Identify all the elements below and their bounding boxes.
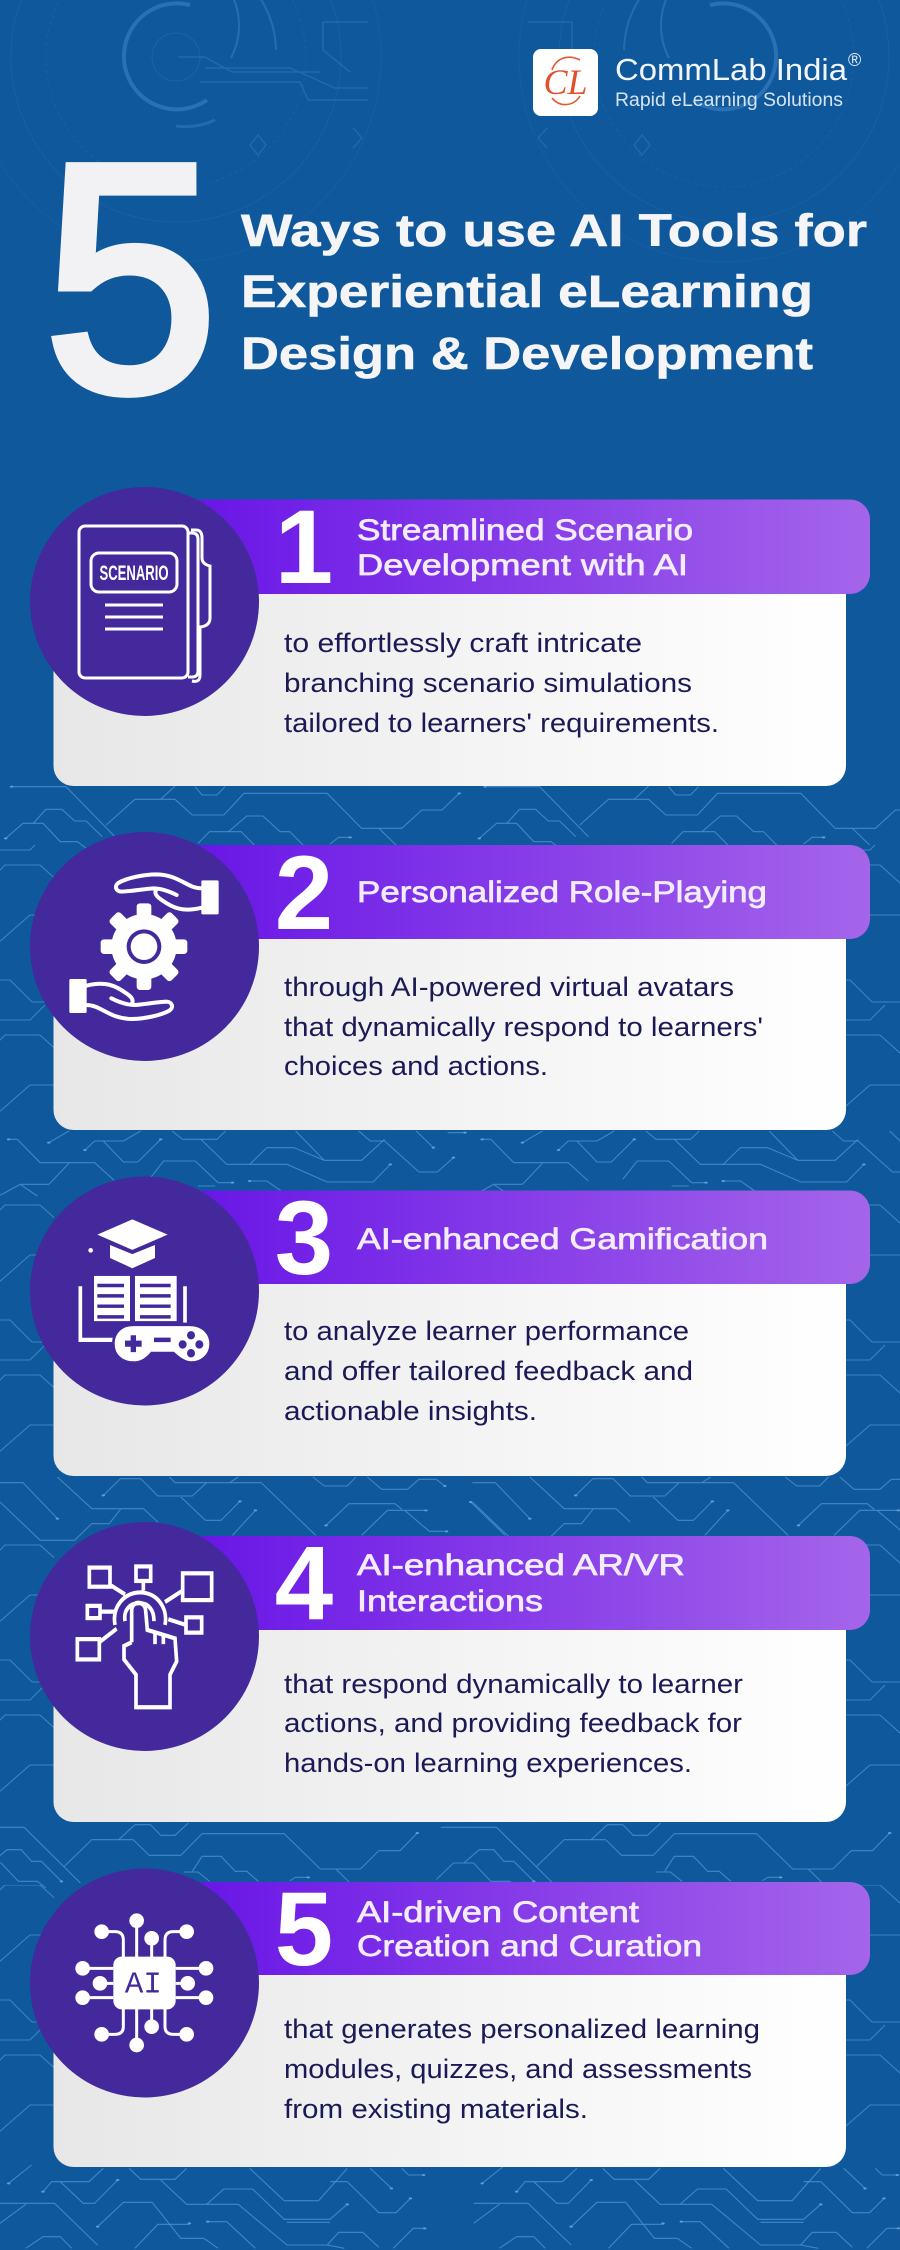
card 4 [54, 1577, 846, 1822]
heading 4: Interactions [357, 1585, 543, 1618]
body text 5 [284, 2014, 760, 2124]
body text 4: actions, and providing feedback for [284, 1708, 742, 1738]
open book [80, 1276, 185, 1340]
body text 1: tailored to learners' requirements. [284, 708, 719, 738]
body text 2 [284, 972, 763, 1081]
card 3 [54, 1231, 846, 1476]
gear [101, 903, 187, 990]
number 1: 1 [275, 489, 333, 606]
card 5 [54, 1922, 846, 2167]
registered mark: ® [848, 50, 861, 70]
logo name: CommLab India [615, 52, 848, 87]
circuit lines between panels 3 and 4 [0, 1477, 900, 1540]
logo mark: CL [543, 62, 588, 102]
body text 3: actionable insights. [284, 1396, 537, 1426]
circle 1 [30, 487, 259, 716]
heading 5: Creation and Curation [357, 1930, 702, 1963]
body text 1 [284, 628, 719, 738]
heading 5: AI-driven Content [357, 1896, 640, 1929]
body text 4: that respond dynamically to learner [284, 1669, 743, 1699]
body text 5: modules, quizzes, and assessments [284, 2054, 752, 2084]
title [241, 205, 867, 379]
body text 3 [284, 1316, 693, 1426]
circuit lines at the bottom [0, 2165, 900, 2248]
body text 3: and offer tailored feedback and [284, 1356, 693, 1386]
icon: AI chip [75, 1913, 213, 2052]
number 4: 4 [275, 1525, 333, 1642]
big number 5: 5 [44, 97, 218, 459]
icon: scenario document [79, 526, 210, 681]
body text 2: through AI-powered virtual avatars [284, 972, 734, 1002]
icon: touch network [77, 1566, 212, 1707]
panel 4: AR/VR [30, 1522, 870, 1822]
number 2: 2 [275, 835, 333, 952]
circle 4 [30, 1522, 259, 1751]
chip traces [83, 1921, 206, 2045]
header bar 4 [144, 1536, 870, 1630]
panel 2: role-playing [30, 832, 870, 1130]
header bar 1 [144, 500, 870, 594]
body text 2: choices and actions. [284, 1051, 548, 1081]
lower hand [71, 980, 172, 1019]
chip nodes [75, 1913, 213, 2052]
logo [533, 49, 861, 116]
circle 3 [30, 1176, 259, 1406]
icon: hands and gear [71, 874, 217, 1019]
number 5: 5 [275, 1871, 333, 1988]
header bar 2 [144, 845, 870, 939]
background HUD left [0, 0, 381, 262]
heading 2: Personalized Role-Playing [357, 876, 767, 909]
number 3: 3 [275, 1180, 333, 1297]
body text 1: branching scenario simulations [284, 668, 692, 698]
background HUD right [519, 0, 900, 262]
circle 5 [30, 1868, 259, 2098]
header bar 5 [144, 1882, 870, 1975]
logo tagline: Rapid eLearning Solutions [615, 90, 843, 111]
graduation cap [88, 1219, 168, 1268]
heading 3: AI-enhanced Gamification [357, 1223, 768, 1256]
upper hand [116, 874, 217, 913]
heading 1: Development with AI [357, 549, 688, 582]
heading 1 [357, 514, 693, 582]
title: Ways to use AI Tools for [241, 205, 867, 256]
chip label: AI [125, 1968, 162, 2003]
icon: scenario document: SCENARIO [100, 562, 168, 585]
gamepad [113, 1325, 211, 1363]
background circuit pattern in side margins [0, 845, 900, 2160]
heading 4 [357, 1549, 685, 1618]
heading 1: Streamlined Scenario [357, 514, 693, 547]
circuit lines between panels 1 and 2 [4, 786, 900, 848]
heading 4: AI-enhanced AR/VR [357, 1549, 685, 1582]
heading 5 [357, 1896, 702, 1963]
title: Experiential eLearning [241, 266, 813, 317]
logo mark [533, 49, 598, 116]
circuit lines between panels 2 and 3 [0, 1131, 900, 1196]
body text 1: to effortlessly craft intricate [284, 628, 642, 658]
panel 1: scenario development [30, 487, 870, 786]
body text 3: to analyze learner performance [284, 1316, 689, 1346]
icon: cap, book and gamepad [80, 1219, 211, 1363]
body text 5: that generates personalized learning [284, 2014, 760, 2044]
circle 2 [30, 832, 259, 1061]
card 1 [54, 540, 846, 786]
panel 5: content creation [30, 1868, 870, 2167]
body text 4: hands-on learning experiences. [284, 1748, 692, 1778]
circuit lines between panels 4 and 5 [0, 1823, 891, 1888]
title: Design & Development [241, 328, 813, 379]
card 2 [54, 885, 846, 1130]
header bar 3 [144, 1190, 870, 1284]
body text 4 [284, 1669, 743, 1778]
body text 5: from existing materials. [284, 2094, 588, 2124]
body text 2: that dynamically respond to learners' [284, 1012, 763, 1042]
panel 3: gamification [30, 1176, 870, 1476]
